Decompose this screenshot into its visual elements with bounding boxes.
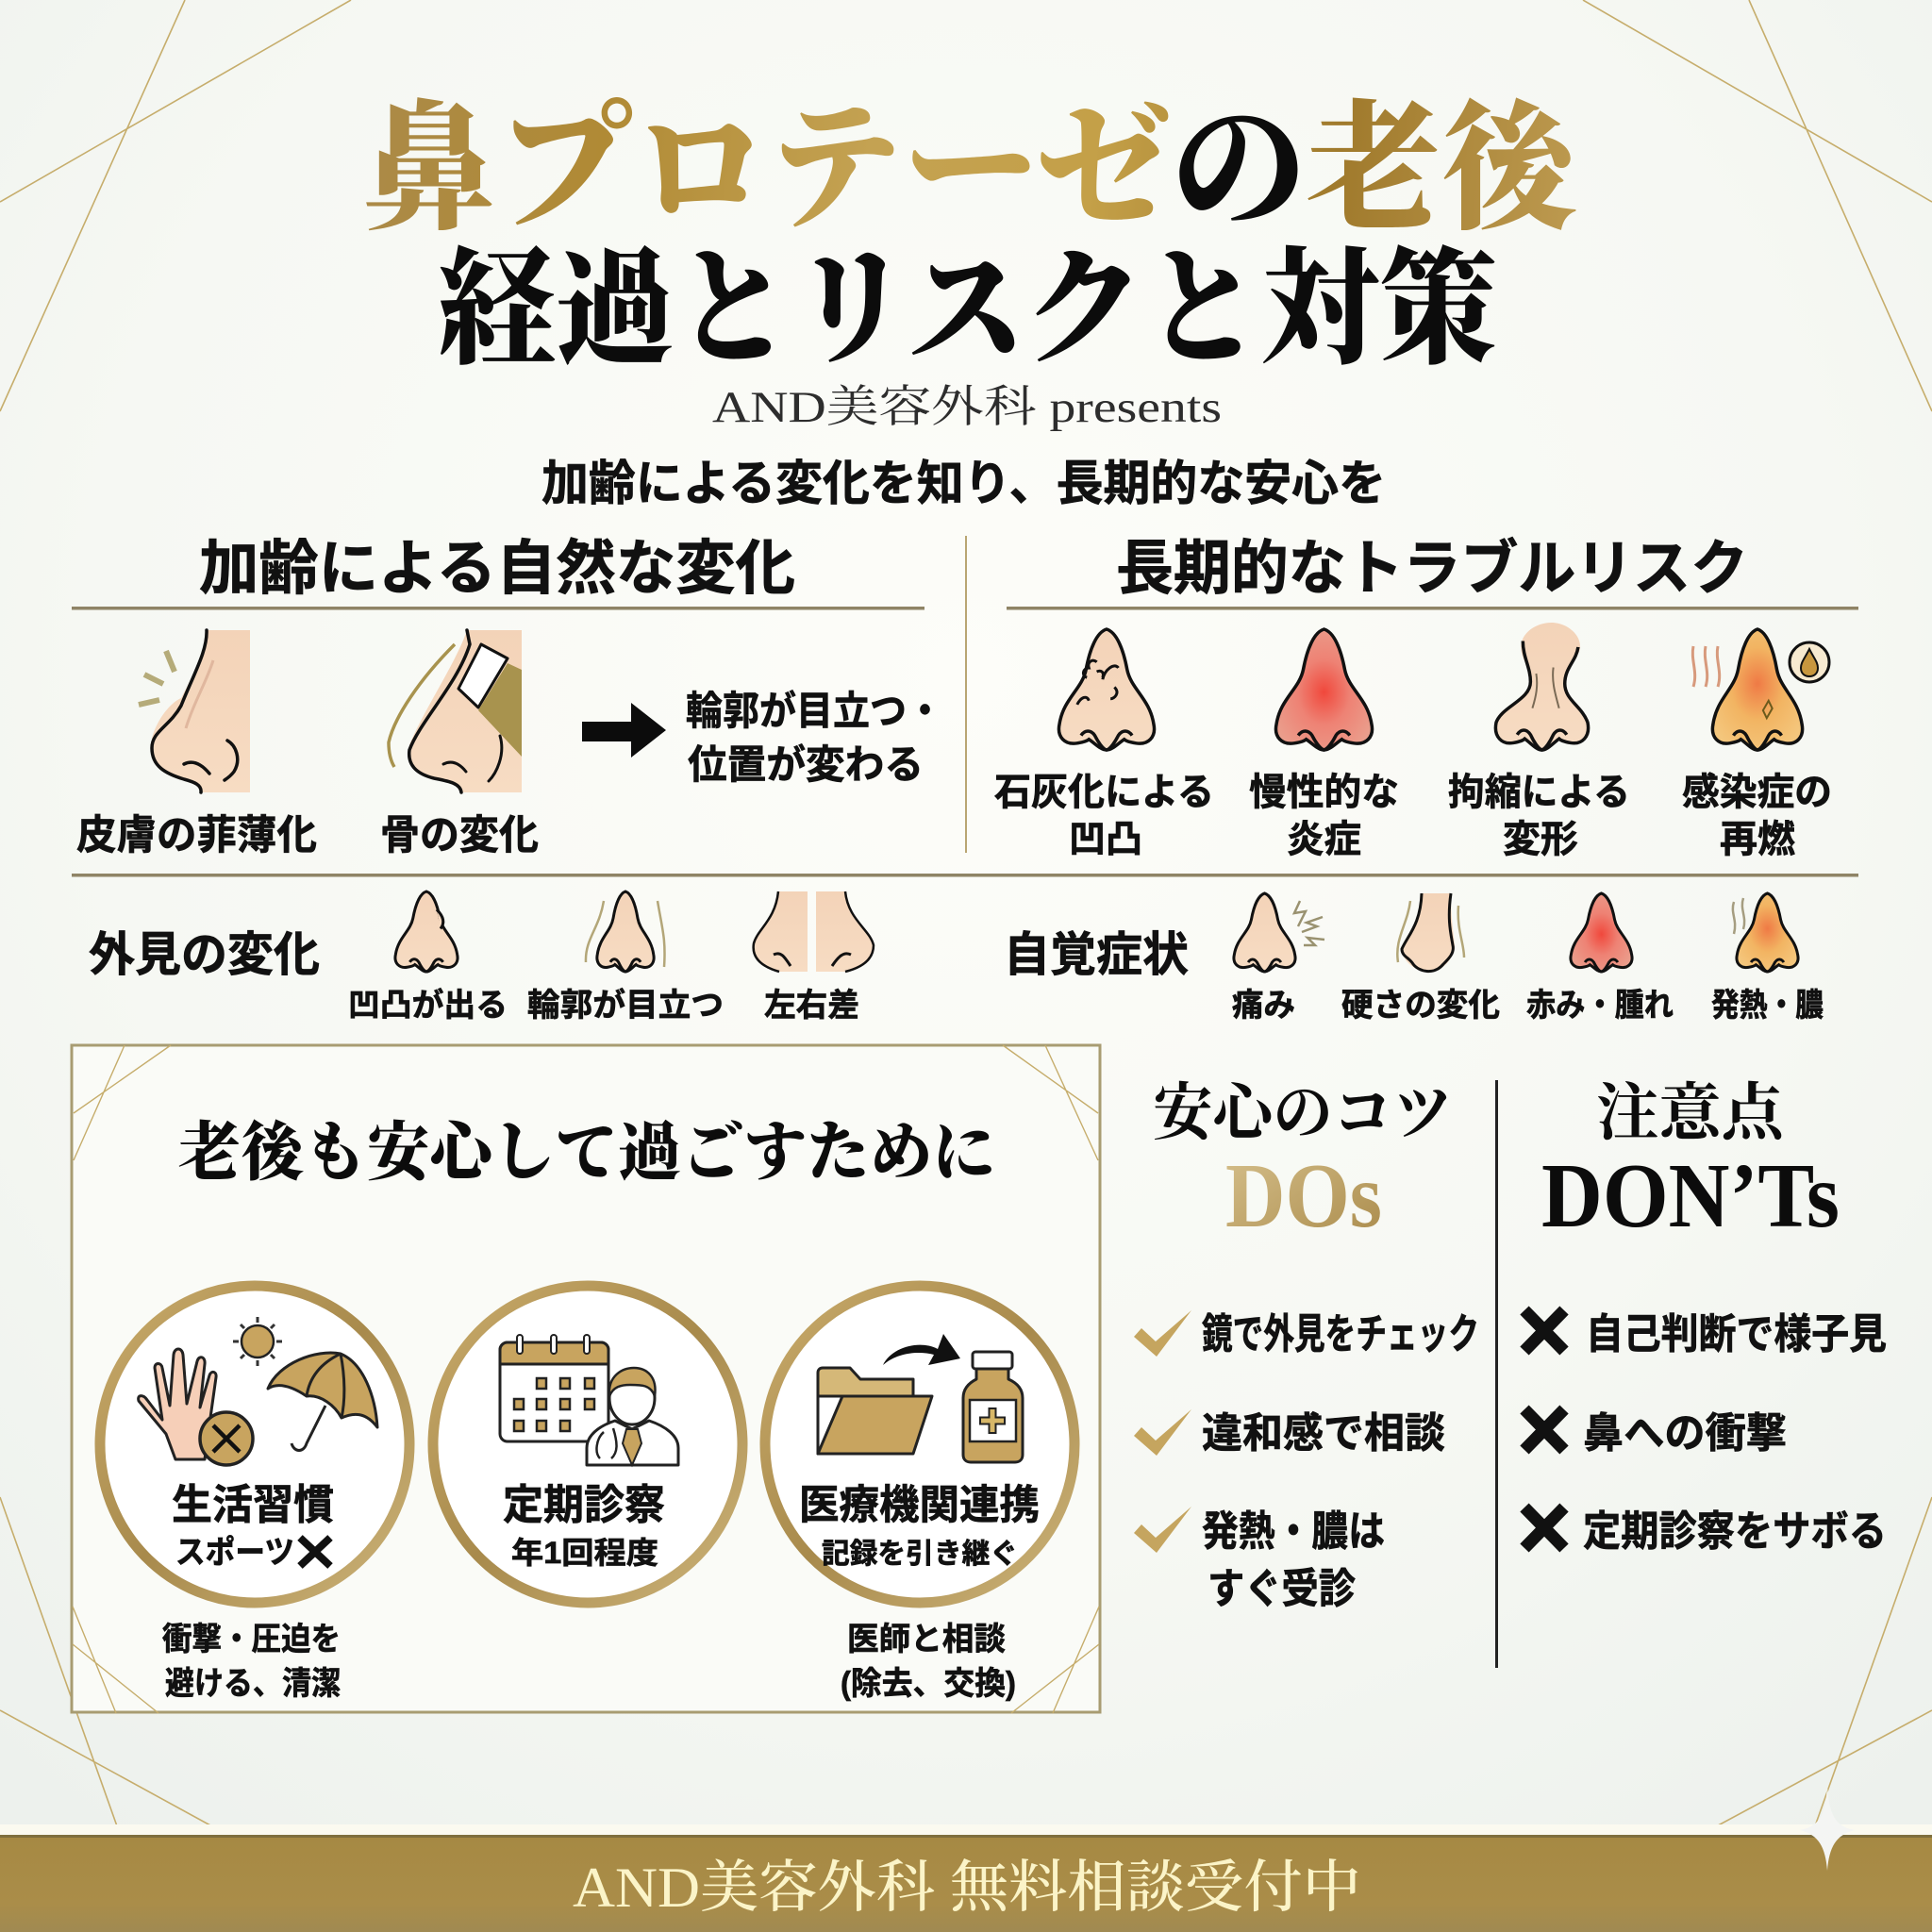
note: lifestyle: 避ける、清潔 [165,1666,341,1702]
icon: arrow [883,1334,960,1365]
card: medical cooperation: 記録を引き継ぐ [822,1539,1018,1570]
card: regular checkups: 年1回程度 [511,1536,658,1570]
symptom labels: 硬さの変化 [1341,988,1500,1024]
item 1: 鏡で外見をチェック [1202,1311,1479,1357]
risk labels: 変形 [1503,819,1578,860]
item 3: 発熱・膿は [1202,1508,1385,1555]
card: lifestyle [100,1286,409,1603]
item 2: 違和感で相談 [1202,1410,1445,1457]
icon: asymmetry [754,891,874,972]
appearance labels: 凹凸が出る [348,987,508,1024]
card: regular checkups [433,1286,742,1603]
icon: bone change nose [389,630,522,792]
appearance labels: 左右差 [764,988,859,1024]
icon: redness [1571,893,1632,972]
heading: long-term risks: 長期的なトラブルリスク [1116,536,1748,602]
heading: 安心のコツ [1153,1079,1453,1148]
icon: sun [233,1317,282,1366]
column: DOs [1134,1079,1479,1612]
symptom labels: 赤み・腫れ [1526,988,1674,1024]
risk icon 1: calcification [1058,629,1155,750]
icon: sparkle star [1800,1786,1855,1871]
card text: 定期診察 [503,1482,665,1528]
note: medical cooperation: (除去、交換) [841,1666,1016,1702]
icon: doctor [587,1368,678,1465]
subtitle: 加齢による変化を知り、長期的な安心を [541,457,1386,510]
icon: visible outline [586,891,665,972]
icon: hand with cross [139,1349,253,1465]
appearance labels: 輪郭が目立つ [527,987,724,1024]
heading: symptoms: 自覚症状 [1004,928,1189,981]
footer band [0,1835,1932,1932]
risk labels: 凹凸 [1069,819,1142,860]
text: result [686,689,943,787]
label: bone change: 骨の変化 [380,813,539,858]
item 1 [1134,1310,1479,1357]
risk icon 2: chronic inflammation [1275,629,1373,750]
footer text: AND美容外科 無料相談受付中 [573,1857,1361,1919]
risk labels [994,772,1832,860]
label: skin thinning: 皮膚の菲薄化 [76,813,317,858]
presents line: AND美容外科 presents [712,383,1222,432]
heading: natural changes: 加齢による自然な変化 [199,536,795,602]
icon: folder [818,1368,932,1454]
risk labels: 再燃 [1720,819,1795,860]
arrow [582,703,666,758]
icon: fever [1733,893,1798,972]
symptom labels: 痛み [1232,988,1295,1024]
icon: pain [1234,893,1324,972]
risk icon 3: contracture [1495,623,1589,750]
heading: appearance: 外見の変化 [89,928,320,981]
icon: skin thinning nose [139,630,250,792]
heading: 注意点 [1596,1079,1788,1148]
card text: 医療機関連携 [799,1483,1040,1528]
note: medical cooperation: 医師と相談 [847,1622,1006,1657]
title line 2: 経過とリスクと対策 [438,241,1497,380]
card: medical cooperation [765,1286,1074,1603]
note: lifestyle: 衝撃・圧迫を [162,1622,341,1657]
note: medical cooperation [841,1622,1016,1702]
risk labels: 拘縮による [1448,772,1630,813]
risk icon 4: infection relapse [1692,629,1829,750]
risk labels: 石灰化による [994,772,1214,813]
item 2: 鼻への衝撃 [1583,1410,1787,1457]
risk labels: 炎症 [1287,819,1361,860]
symptom labels [1232,988,1824,1024]
appearance labels [348,987,859,1024]
DOs word: DOs [1225,1145,1382,1247]
card: lifestyle: スポーツ [175,1535,294,1571]
item 3 [1134,1507,1385,1612]
text: result: 輪郭が目立つ・ [686,689,943,733]
card text: 生活習慣 [172,1482,334,1528]
icon: umbrella [268,1353,377,1451]
item 3: すぐ受診 [1208,1566,1356,1612]
risk labels: 感染症の [1682,772,1832,813]
icon: calendar [500,1335,608,1441]
icon: medicine bottle [963,1352,1023,1462]
symptom labels: 発熱・膿 [1711,988,1824,1024]
panel heading: 老後も安心して過ごすために [178,1117,995,1189]
column: DON'Ts [1524,1079,1887,1555]
item 3: 定期診察をサボる [1583,1508,1887,1555]
note: lifestyle [162,1622,341,1702]
DON'Ts word: DON’Ts [1541,1145,1840,1247]
risk labels: 慢性的な [1249,772,1399,813]
panel: peace of mind in later years [72,1045,1100,1713]
icon: bumps [395,891,458,972]
title line 1: 鼻プロテーゼの老後 [361,93,1586,248]
item 1: 自己判断で様子見 [1586,1311,1887,1357]
icon: hardness [1397,893,1464,972]
text: result: 位置が変わる [688,742,924,787]
